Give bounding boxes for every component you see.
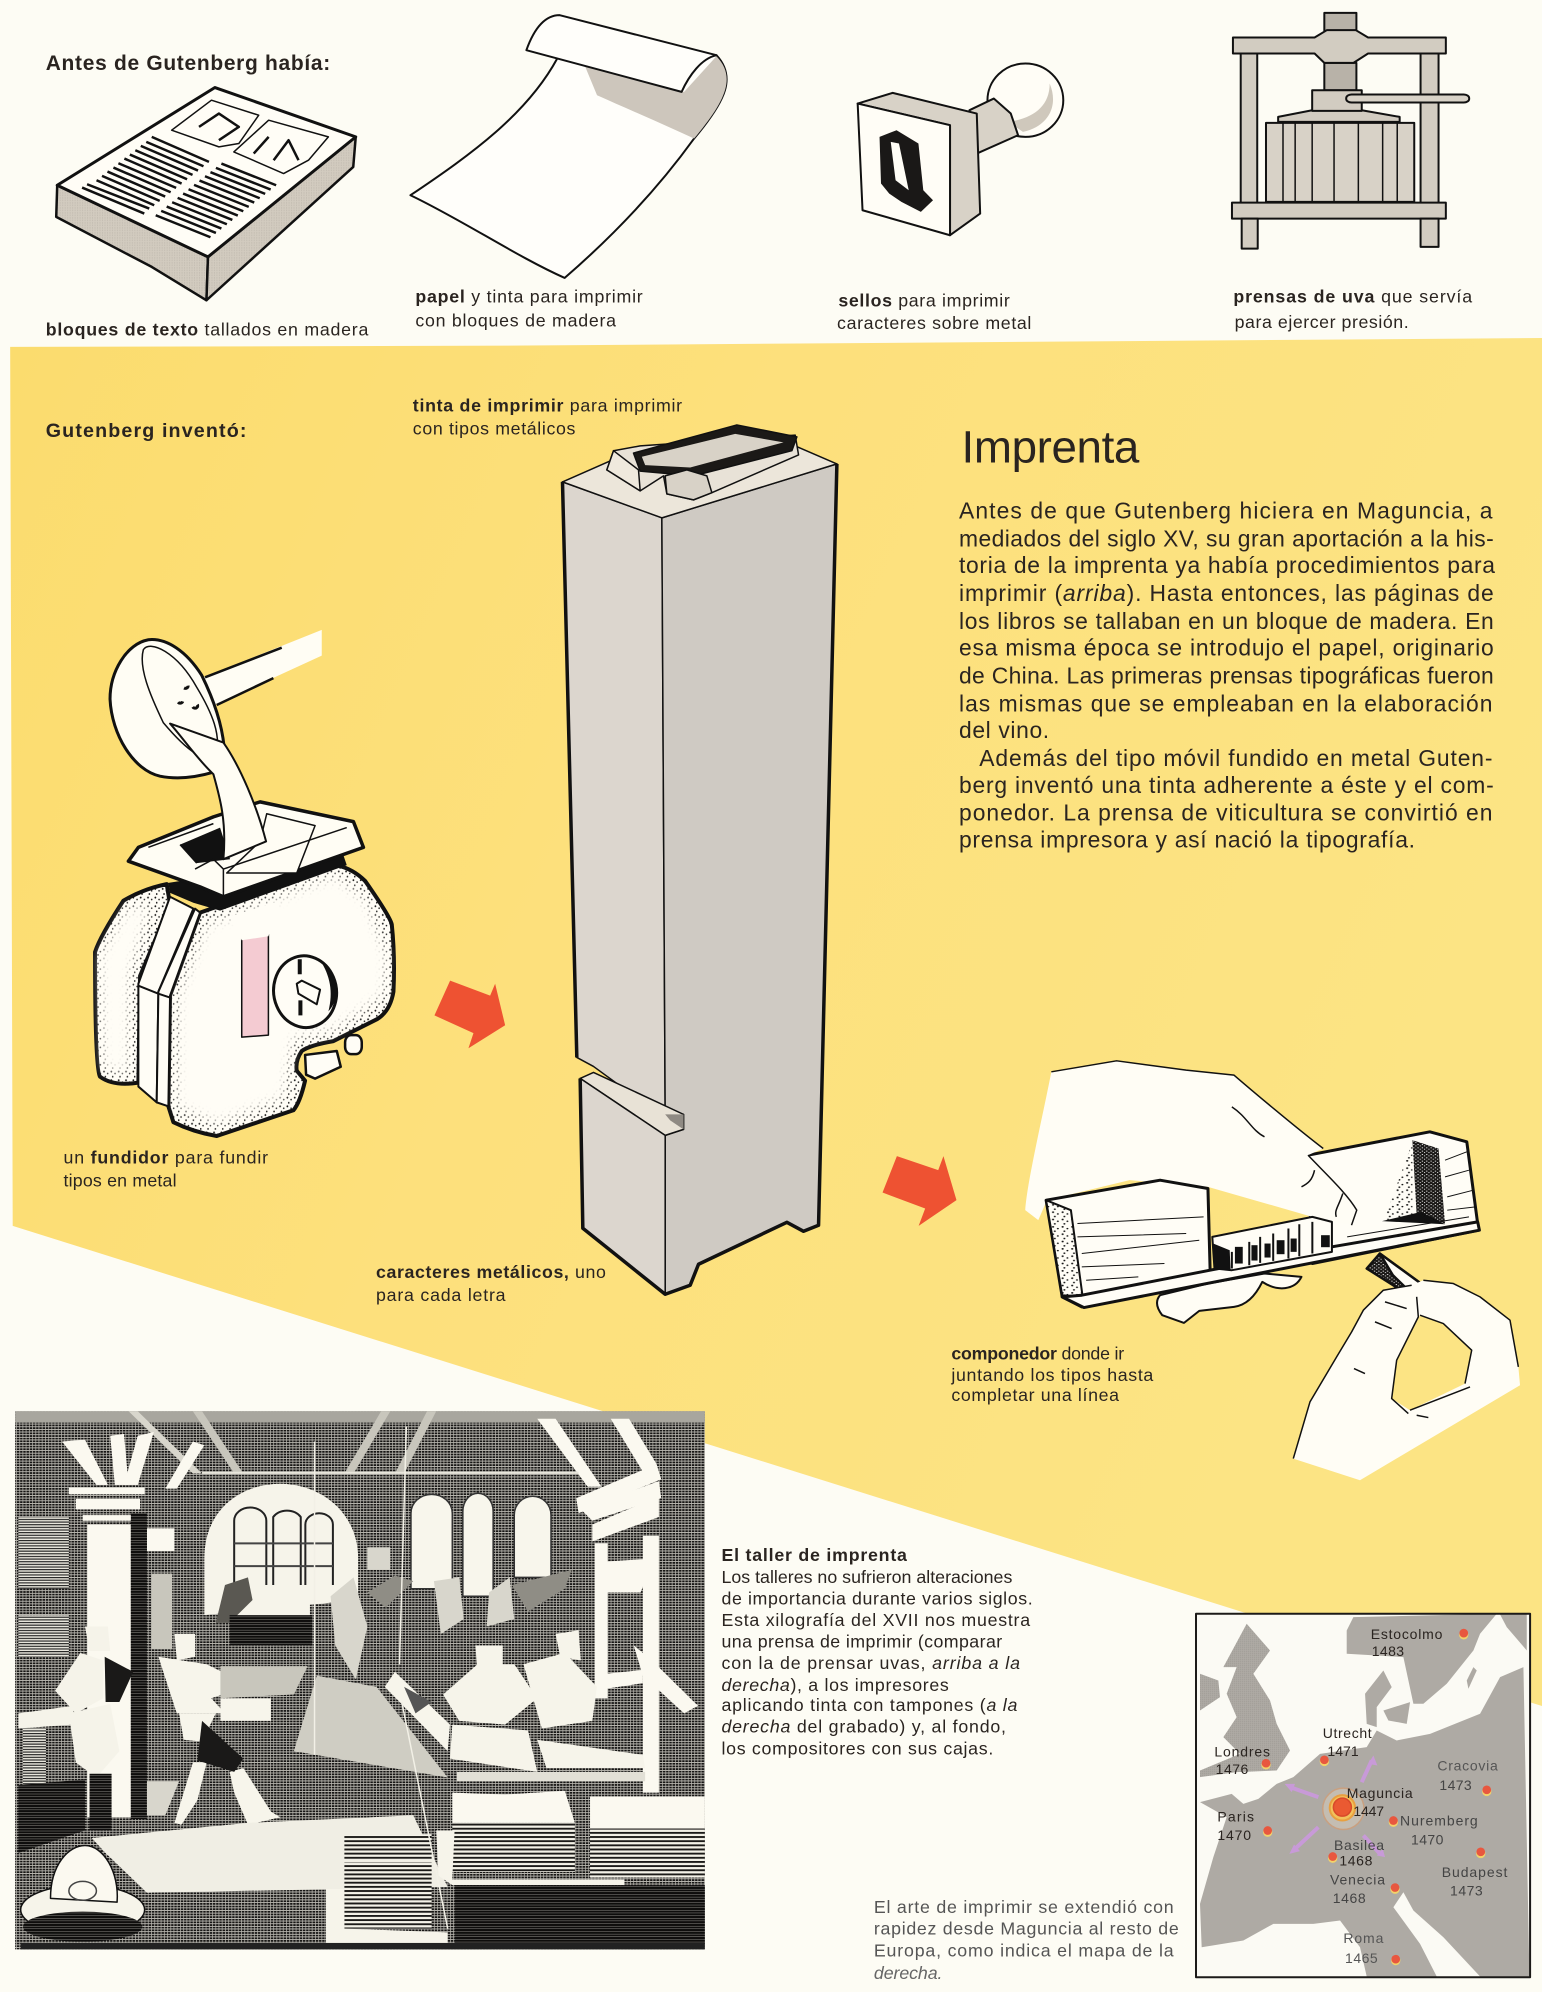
icon: lower hand bbox=[1293, 1280, 1520, 1480]
caption: composing stick: juntando los tipos hasta bbox=[950, 1365, 1153, 1385]
article text: Además del tipo móvil fundido en metal Guten- bbox=[979, 745, 1492, 771]
city labels: 1471 bbox=[1327, 1743, 1359, 1759]
article text: mediados del siglo XV, su gran aportación a la his- bbox=[959, 525, 1494, 551]
arrow: type to composing stick bbox=[883, 1156, 956, 1226]
caption: composing stick bbox=[950, 1343, 1153, 1405]
caption: the workshop: con la de prensar uvas, arriba a la bbox=[721, 1653, 1020, 1673]
ladle bbox=[110, 630, 322, 778]
caption: metal types bbox=[376, 1262, 606, 1305]
title: Imprenta bbox=[962, 422, 1140, 473]
foot and button bbox=[305, 1051, 341, 1079]
caption: the workshop: Esta xilografía del XVII nos muestra bbox=[721, 1610, 1030, 1630]
caption: printing ink: tinta de imprimir para imprimir bbox=[413, 396, 682, 416]
section heading: before Gutenberg: Antes de Gutenberg había: bbox=[46, 52, 330, 75]
spread arrows bbox=[1290, 1760, 1380, 1854]
caption: spread across Europe: Europa, como indica el mapa de la bbox=[874, 1940, 1174, 1960]
city labels: Paris bbox=[1217, 1809, 1254, 1825]
caption: the workshop bbox=[721, 1545, 1033, 1758]
arched window bbox=[204, 1484, 358, 1615]
left figure bbox=[55, 1626, 119, 1778]
caption: the workshop: una prensa de imprimir (comparar bbox=[721, 1632, 1002, 1652]
front block bbox=[1046, 1180, 1210, 1307]
icon: metal stamp with Q bbox=[858, 64, 1063, 235]
stream of metal bbox=[170, 724, 266, 859]
printers bbox=[443, 1630, 645, 1772]
caption: composing stick: componedor donde ir bbox=[951, 1343, 1124, 1363]
land masses bbox=[1200, 1614, 1529, 1977]
article text: prensa impresora y así nació la tipografía. bbox=[959, 826, 1415, 852]
city labels: 1473 bbox=[1439, 1777, 1472, 1793]
caption: stamps bbox=[837, 290, 1031, 333]
icon: grape press bbox=[1232, 13, 1469, 249]
caption: founder: tipos en metal bbox=[64, 1171, 177, 1191]
article text: de China. Las primeras prensas tipográficas fueron bbox=[959, 663, 1494, 689]
caption: paper: con bloques de madera bbox=[415, 311, 616, 331]
map of Europe bbox=[1196, 1614, 1530, 1977]
caption: the workshop: de importancia durante varios siglos. bbox=[721, 1588, 1033, 1608]
city labels: Estocolmo bbox=[1371, 1626, 1443, 1642]
caption: paper bbox=[415, 286, 643, 331]
arrow: founder to type bbox=[434, 981, 505, 1048]
top hand bbox=[1025, 1061, 1357, 1225]
caption: the workshop: los compositores con sus cajas. bbox=[721, 1738, 993, 1758]
pillar and capital bbox=[62, 1432, 204, 1817]
caption: stamps: sellos para imprimir bbox=[838, 290, 1010, 310]
article text: imprimir (arriba). Hasta entonces, las páginas de bbox=[959, 580, 1494, 606]
mould details bbox=[242, 934, 268, 1037]
type row bbox=[1212, 1217, 1332, 1270]
caption: printing ink: con tipos metálicos bbox=[413, 419, 576, 439]
caption: founder: un fundidor para fundir bbox=[64, 1148, 268, 1168]
caption: spread across Europe: rapidez desde Maguncia al resto de bbox=[874, 1919, 1179, 1939]
Maguncia rings bbox=[1323, 1788, 1364, 1830]
article text: los libros se tallaban en un bloque de madera. En bbox=[959, 608, 1494, 634]
icon: carved woodblock bbox=[56, 88, 356, 300]
caption: stamps: caracteres sobre metal bbox=[837, 313, 1031, 333]
city labels: Basilea bbox=[1334, 1837, 1384, 1853]
city dots bbox=[1261, 1629, 1491, 1965]
icon: type founder with ladle bbox=[95, 630, 394, 1136]
caption: metal types: para cada letra bbox=[376, 1285, 506, 1305]
city labels bbox=[1214, 1626, 1508, 1966]
floor bbox=[294, 1676, 448, 1778]
caption: composing stick: completar una línea bbox=[951, 1385, 1119, 1405]
article text: berg inventó una tinta adherente a éste y el com- bbox=[959, 772, 1494, 798]
grindstone bbox=[21, 1846, 145, 1942]
yellow background panel bbox=[10, 338, 1542, 1706]
article text: del vino. bbox=[959, 717, 1049, 743]
city labels: 1465 bbox=[1345, 1950, 1378, 1966]
caption: text blocks: bloques de texto tallados en madera bbox=[46, 320, 368, 340]
article text: esa misma época se introdujo el papel, originario bbox=[959, 635, 1494, 661]
held type bbox=[1367, 1254, 1423, 1300]
city labels: Maguncia bbox=[1347, 1785, 1413, 1801]
city labels: Utrecht bbox=[1323, 1725, 1372, 1741]
caption: the workshop: derecha del grabado) y, al fondo, bbox=[721, 1717, 1006, 1737]
top plate bbox=[128, 802, 363, 897]
compositors in background bbox=[331, 1547, 572, 1679]
centre strips bbox=[138, 897, 193, 1102]
city labels: 1447 bbox=[1353, 1803, 1384, 1819]
press frame at right bbox=[576, 1464, 698, 1793]
caption: founder bbox=[64, 1148, 268, 1191]
article text bbox=[959, 497, 1495, 852]
caption: paper: papel y tinta para imprimir bbox=[415, 286, 643, 306]
table at left bbox=[18, 1706, 73, 1728]
city labels: 1476 bbox=[1216, 1761, 1249, 1777]
caption: grape presses bbox=[1233, 286, 1472, 332]
composing stick right wall bbox=[1308, 1132, 1479, 1264]
caption: spread across Europe: El arte de imprimir se extendió con bbox=[874, 1897, 1174, 1917]
printed stacks bbox=[452, 1791, 575, 1823]
city labels: 1473 bbox=[1450, 1883, 1483, 1899]
caption: the workshop: aplicando tinta con tampones (a la bbox=[721, 1695, 1018, 1715]
icon: curled sheet of paper bbox=[410, 15, 727, 278]
city labels: 1468 bbox=[1333, 1890, 1366, 1906]
caption: spread across Europe bbox=[874, 1897, 1179, 1983]
city labels: Cracovia bbox=[1437, 1757, 1498, 1773]
body bbox=[95, 884, 170, 1084]
caption: grape presses: para ejercer presión. bbox=[1235, 312, 1409, 332]
side windows bbox=[411, 1493, 551, 1596]
caption: the workshop: Los talleres no sufrieron alteraciones bbox=[721, 1567, 1012, 1587]
caption: grape presses: prensas de uva que servía bbox=[1233, 286, 1472, 306]
caption: spread across Europe: derecha. bbox=[874, 1963, 942, 1983]
article text: Antes de que Gutenberg hiciera en Maguncia, a bbox=[959, 497, 1493, 523]
city labels: Londres bbox=[1214, 1743, 1270, 1759]
article text: ponedor. La prensa de viticultura se convirtió en bbox=[959, 800, 1492, 826]
centre figure bbox=[158, 1634, 308, 1825]
article text: toria de la imprenta ya había procedimientos para bbox=[959, 552, 1495, 578]
section heading: Gutenberg invented: Gutenberg inventó: bbox=[46, 420, 246, 442]
city labels: Roma bbox=[1343, 1930, 1384, 1946]
caption: the workshop: El taller de imprenta bbox=[721, 1545, 907, 1565]
caption: metal types: caracteres metálicos, uno bbox=[376, 1262, 606, 1282]
map frame bbox=[1196, 1614, 1530, 1977]
icon: hand and composing stick bbox=[1025, 1061, 1479, 1323]
tympan frame bbox=[385, 1672, 450, 1751]
city labels: Budapest bbox=[1442, 1864, 1508, 1880]
article text: las mismas que se empleaban en la elaboración bbox=[959, 690, 1492, 716]
city labels: Venecia bbox=[1330, 1872, 1385, 1888]
ceiling beams bbox=[15, 1411, 705, 1487]
caption: printing ink bbox=[413, 396, 682, 439]
left wall panels bbox=[18, 1517, 69, 1589]
city labels: 1468 bbox=[1339, 1853, 1373, 1869]
engraving: printing workshop bbox=[15, 1411, 705, 1949]
press cords bbox=[315, 1426, 448, 1929]
lower fingers bbox=[1157, 1274, 1301, 1323]
black band under plate bbox=[168, 855, 347, 911]
city labels: 1470 bbox=[1217, 1827, 1251, 1843]
caption: the workshop: derecha), a los impresores bbox=[721, 1675, 949, 1695]
city labels: Nuremberg bbox=[1400, 1813, 1478, 1829]
city labels: 1483 bbox=[1372, 1643, 1404, 1659]
icon: tall metal type bbox=[562, 425, 837, 1294]
city labels: 1470 bbox=[1411, 1832, 1444, 1848]
